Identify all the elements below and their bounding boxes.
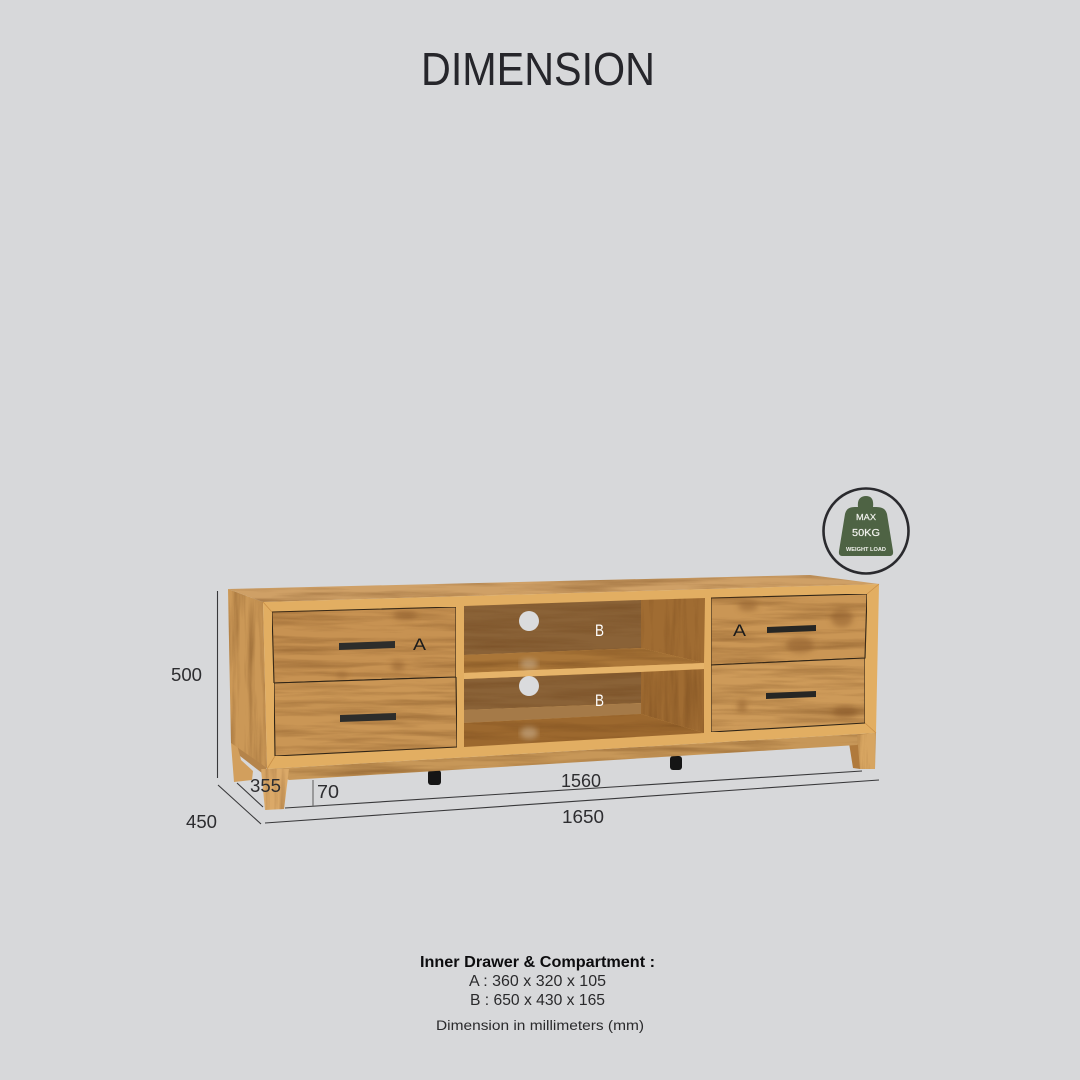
lower left drawer xyxy=(274,677,457,756)
dimension labels: 1650 xyxy=(562,807,604,827)
apron rail xyxy=(267,733,876,780)
frame mitre lines xyxy=(263,584,879,769)
dimension labels: 70 xyxy=(317,782,339,802)
icon: max weight load badge: MAX xyxy=(856,513,877,522)
top surface xyxy=(228,575,879,602)
upper back wall xyxy=(464,600,641,655)
upper left handle xyxy=(339,641,395,650)
black castor feet xyxy=(428,756,682,785)
left side apron xyxy=(237,745,267,773)
compartment floor xyxy=(464,714,704,747)
knots xyxy=(336,610,417,678)
dimension labels: 355 xyxy=(250,776,281,796)
right drawers xyxy=(711,594,867,732)
dimension labels: 1560 xyxy=(561,771,601,791)
compartment labels: A xyxy=(733,621,747,640)
dimension labels: 450 xyxy=(186,812,217,832)
inner drawer and compartment sizes: Dimension in millimeters (mm) xyxy=(436,1018,644,1033)
centre compartment xyxy=(464,598,705,747)
lower right handle xyxy=(766,691,816,699)
upper right handle xyxy=(767,625,816,633)
TV cabinet xyxy=(228,575,879,810)
upper left drawer xyxy=(272,607,456,683)
cable hole reflections xyxy=(520,659,538,739)
icon: max weight load badge: 50KG xyxy=(852,527,880,539)
compartment labels: B xyxy=(595,691,604,710)
inner drawer and compartment sizes xyxy=(420,954,655,1033)
cable hole lower xyxy=(519,676,539,696)
inner drawer and compartment sizes: A : 360 x 320 x 105 xyxy=(469,973,606,990)
inner drawer and compartment sizes: B : 650 x 430 x 165 xyxy=(470,992,605,1009)
shelf top xyxy=(464,648,704,673)
back left leg xyxy=(231,743,253,782)
front frame xyxy=(263,584,879,769)
upper right drawer xyxy=(711,594,867,665)
left side panel xyxy=(228,589,267,768)
front left leg xyxy=(261,769,289,810)
left drawers xyxy=(272,607,457,756)
dimension labels xyxy=(171,665,604,832)
lower back wall xyxy=(464,672,641,710)
title: DIMENSION xyxy=(421,43,655,95)
dimension labels: 500 xyxy=(171,665,202,685)
lower left handle xyxy=(340,713,396,722)
knots xyxy=(737,601,857,718)
front right leg xyxy=(857,733,876,769)
icon: max weight load badge: WEIGHT LOAD xyxy=(846,547,886,553)
lower right wall xyxy=(641,669,704,733)
lower right drawer xyxy=(711,658,865,732)
shelf front edge xyxy=(464,663,704,679)
dimension lines xyxy=(218,591,879,824)
inner drawer and compartment sizes: Inner Drawer & Compartment : xyxy=(420,954,655,971)
icon: max weight load badge xyxy=(824,488,908,574)
compartment labels: B xyxy=(595,621,604,640)
lower kick board xyxy=(464,703,643,723)
upper right wall xyxy=(641,598,705,663)
compartment labels: A xyxy=(413,635,427,654)
cable hole upper xyxy=(519,611,539,631)
compartment labels xyxy=(413,621,747,710)
back right leg xyxy=(849,743,860,769)
